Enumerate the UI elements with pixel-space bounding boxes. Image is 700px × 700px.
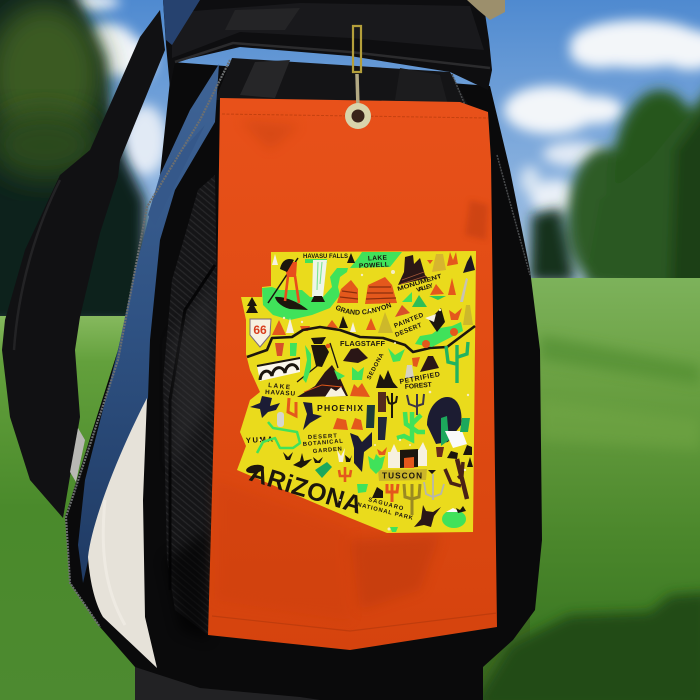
map labels: PETRIFIED [399, 371, 441, 386]
vintage car [415, 308, 463, 348]
map labels: MONUMENT [397, 274, 443, 293]
clouds [50, 0, 700, 216]
66 highway sign: 66 [253, 323, 267, 337]
map labels: POWELL [359, 261, 389, 270]
map labels: FOREST [405, 382, 433, 391]
green cactus [397, 412, 425, 440]
map labels: GRAND CANYON [336, 302, 392, 315]
grommet and clip [345, 26, 371, 129]
right trees [530, 75, 700, 300]
carrying strap [2, 10, 165, 518]
orange rock groups [333, 383, 370, 430]
arizona swash [245, 463, 265, 475]
red rock buttes [337, 277, 397, 304]
map labels: VALLEY [416, 283, 434, 294]
map labels: DESERT [394, 322, 423, 339]
green lake region at Havasu [262, 268, 348, 320]
map labels: HAVASU [265, 389, 296, 398]
gray capsule [277, 412, 284, 427]
map labels: FLAGSTAFF [340, 339, 385, 348]
orange plant by mission [377, 447, 387, 455]
fairway grass left [0, 316, 160, 700]
Saguaro National Park cluster [414, 470, 466, 528]
bag body [65, 62, 542, 700]
map labels: PAINTED [393, 312, 425, 330]
map labels: HAVASU FALLS [303, 254, 348, 260]
blue top corner [163, 0, 200, 45]
petrified forest rocks [405, 356, 439, 378]
map labels: SAGUARO [367, 497, 404, 512]
upper panel [215, 58, 468, 105]
orange cactus left [288, 398, 296, 416]
green barrel cactus [315, 462, 332, 478]
top collar [163, 0, 492, 90]
fairway grass right [530, 278, 700, 700]
saguaro cactus green [446, 342, 468, 383]
map labels: YUMA [246, 435, 274, 445]
paddleboarder [268, 258, 308, 310]
map labels: BOTANICAL [303, 438, 343, 448]
left trees [0, 0, 145, 325]
tan plant [463, 305, 473, 325]
small confetti [259, 270, 469, 530]
blue panel [78, 64, 219, 583]
textured side pocket [163, 175, 217, 635]
Tucson mission [388, 442, 427, 468]
agave plants [334, 348, 405, 380]
white plant [337, 448, 345, 462]
map labels: NATIONAL PARK [357, 502, 414, 522]
Tuscon cacti [387, 459, 467, 515]
orange small cactus [339, 467, 351, 482]
orange plant [449, 308, 462, 320]
map labels: GARDEN [313, 446, 342, 455]
map labels: LAKE [268, 382, 291, 391]
hot air balloon [427, 397, 470, 457]
Havasu Falls [311, 260, 327, 302]
map labels: LAKE [368, 254, 388, 262]
bottom base [135, 667, 320, 700]
bird and prickly pear near Phoenix [250, 396, 322, 430]
green plants by mission [357, 454, 398, 532]
side buckle [70, 428, 85, 482]
66 highway sign [250, 319, 271, 347]
small plants under road [275, 343, 297, 356]
dark mountain near Phoenix [297, 365, 348, 397]
Flagstaff rock [343, 348, 368, 363]
London Bridge [257, 358, 300, 381]
Lake Powell [350, 252, 402, 268]
map labels [246, 254, 443, 522]
gold and orange buttes [427, 252, 475, 273]
agave black plants [283, 452, 352, 468]
Sedona rocks [376, 370, 398, 388]
map labels: DESERT [308, 433, 338, 441]
route 66 road [247, 326, 475, 357]
white panel [88, 398, 157, 668]
tree icons [246, 253, 355, 328]
painted desert domes [395, 278, 468, 317]
golf bag [2, 0, 542, 700]
Monument Valley rock [398, 255, 428, 285]
map labels: TUSCON [382, 472, 422, 480]
rattlesnake [257, 422, 300, 453]
map labels: SEDONA [366, 352, 386, 381]
colored trees [272, 254, 393, 335]
big prickly pear [350, 432, 372, 472]
towel [208, 26, 497, 650]
Arizona map [237, 251, 476, 533]
dark rocks right [372, 445, 473, 498]
tall blocks [366, 392, 397, 440]
hiker [297, 337, 338, 383]
main zipper [66, 60, 230, 627]
map outline [237, 251, 476, 533]
gray cactus [407, 394, 424, 415]
map labels: PHOENIX [317, 403, 363, 413]
map labels: ARiZONA [246, 459, 365, 520]
grass shadow [470, 592, 700, 700]
metal clasp [467, 0, 505, 20]
sky [0, 0, 700, 330]
